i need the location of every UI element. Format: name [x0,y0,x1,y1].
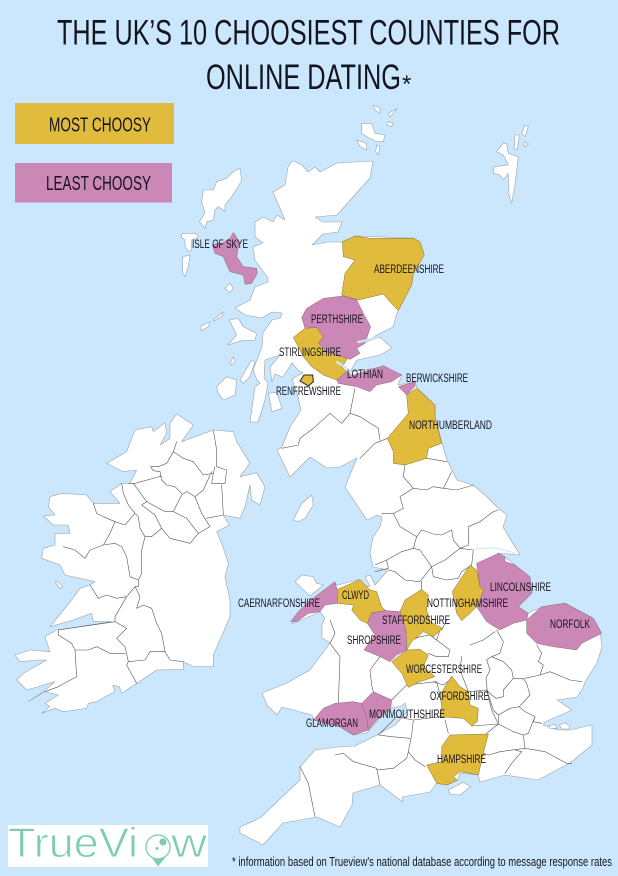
title [57,14,560,98]
title: * [402,71,411,98]
county: Clwyd [336,579,386,623]
logo: TrueView: TrueVi [8,819,138,866]
county: Perthshire [302,296,371,359]
county: Lothian [337,366,402,392]
map: county labels: NOTTINGHAMSHIRE [427,598,508,610]
map: Great Britain mainland [235,161,602,845]
map: county labels: LINCOLNSHIRE [490,582,551,594]
county: Norfolk [527,603,602,650]
map: Thames estuary islands [549,723,570,729]
legend: least choosy [15,163,172,202]
county: Shropshire [364,611,407,662]
legend: most choosy: MOST CHOOSY [49,114,151,136]
map: county labels: LOTHIAN [347,369,383,381]
map: estuaries [337,337,515,553]
county: Hampshire [427,734,488,785]
county: Glamorgan [313,702,368,735]
map: county labels: NORFOLK [550,619,590,631]
logo: TrueView: w [170,819,208,866]
county: Berwickshire [398,382,415,395]
legend: least choosy: LEAST CHOOSY [46,172,151,195]
map: county labels: STAFFORDSHIRE [382,615,450,627]
map: county labels: NORTHUMBERLAND [409,420,492,432]
map: county labels: RENFREWSHIRE [276,386,341,398]
map: county labels: GLAMORGAN [306,718,358,730]
map: county labels: MONMOUTHSHIRE [369,709,445,721]
county: Lincolnshire [477,553,532,630]
map: county boundaries of East Anglia and the south-east [470,630,582,773]
map: Isle of Man, Arran and Anglesey [268,392,323,596]
map: county labels: HAMPSHIRE [437,754,486,766]
map: county labels: ISLE OF SKYE [192,239,248,251]
map: county labels: CAERNARFONSHIRE [238,598,320,610]
title: ONLINE DATING [206,58,401,97]
map: Scottish and outlying islands [182,105,397,400]
legend: most choosy [15,103,174,144]
map: Isle of Wight [448,782,471,795]
map: Shetland [493,125,528,203]
map: county labels: STIRLINGSHIRE [279,347,341,359]
map: county labels: SHROPSHIRE [347,635,401,647]
county: Staffordshire [400,589,443,650]
map: most choosy counties (gold) [293,236,488,785]
map: county labels: ABERDEENSHIRE [374,264,444,276]
icon: map pin [146,835,170,866]
county: Isle of Skye [212,232,257,284]
map: county labels [192,239,590,766]
logo: TrueView [8,819,208,867]
county: Monmouthshire [362,692,392,730]
county: Caernarfonshire [291,582,337,622]
map: county labels: CLWYD [342,590,369,602]
county: Nottinghamshire [452,565,484,621]
county: Worcestershire [392,649,435,687]
map: county boundaries of northern England [282,388,498,589]
map: county labels: WORCESTERSHIRE [406,664,482,676]
map: Lewis and Harris [199,168,242,228]
map: county labels: OXFORDSHIRE [430,691,489,703]
county: Aberdeenshire [342,236,424,311]
county: Stirlingshire [293,327,348,380]
map: county boundaries of southern England and Wales [300,620,498,817]
map: county labels: PERTHSHIRE [311,314,363,326]
legend [15,103,174,202]
map: least choosy counties (pink) [212,232,602,735]
county: Renfrewshire [300,375,313,386]
county: Oxfordshire [440,676,478,726]
map: county labels: BERWICKSHIRE [406,373,468,385]
map: Ireland [15,414,265,713]
county: Northumberland [387,388,442,465]
